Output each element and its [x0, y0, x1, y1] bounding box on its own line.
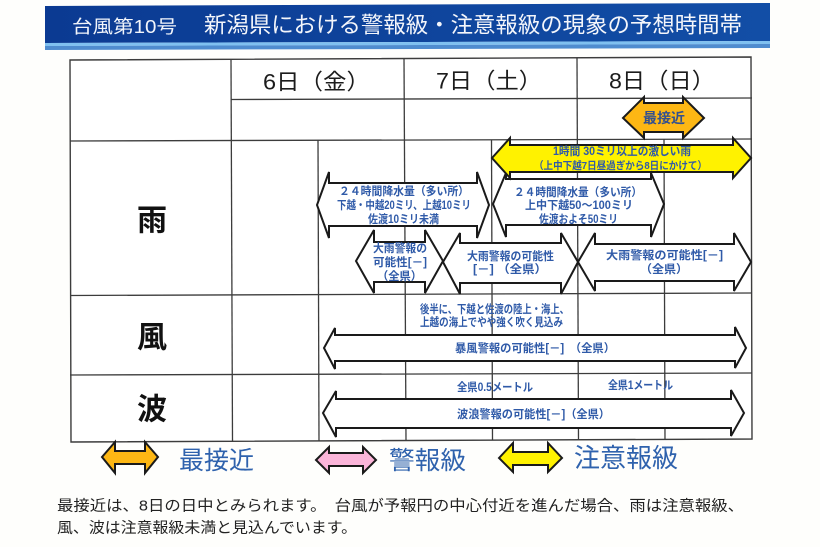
arrow: 24h rain left [317, 172, 489, 238]
legend: advisory level [499, 443, 678, 473]
legend: warning level: 警報級 [389, 447, 466, 475]
arrow: storm warning possibility [324, 327, 746, 369]
arrow: 24h rain right: 佐渡およそ50ミリ [539, 212, 618, 226]
row label: wind: 風 [137, 322, 167, 354]
legend: closest approach [102, 442, 254, 475]
arrow: heavy rain warning possibility 2: [－] （全県） [473, 262, 547, 276]
arrow: 24h rain right: 上中下越50～100ミリ [525, 198, 633, 212]
arrow: heavy rain advisory yellow [492, 138, 751, 178]
timetable grid [70, 57, 752, 442]
footer note: 最接近は、8日の日中とみられます。 台風が予報円の中心付近を進んだ場合、雨は注意報級、 [57, 498, 744, 514]
arrow: closest approach [623, 97, 704, 138]
day: 6th Friday: 6日（金） [263, 70, 370, 94]
arrow: 24h rain left: ２４時間降水量（多い所） [339, 184, 469, 198]
arrow: high wave warning possibility: 波浪警報の可能性[－]（全県） [457, 407, 610, 421]
title banner [45, 3, 770, 50]
arrow: heavy rain warning possibility 1: （全県） [377, 269, 422, 283]
arrow: heavy rain warning possibility 1 [356, 230, 443, 293]
arrow: 24h rain left: 下越・中越20ミリ、上越10ミリ [337, 198, 471, 212]
legend: closest approach: 最接近 [179, 447, 254, 475]
day headers [263, 68, 715, 94]
arrow: heavy rain warning possibility 3: （全県） [640, 262, 688, 276]
arrow: 24h rain left: 佐渡10ミリ未満 [368, 212, 439, 226]
arrow: heavy rain warning possibility 3: 大雨警報の可能性[－] [606, 248, 723, 262]
title: typhoon number: 台風第10号 [72, 17, 177, 37]
arrow: heavy rain advisory yellow: （上中下越7日昼過ぎから8日にかけて） [534, 159, 707, 172]
row label: rain: 雨 [137, 204, 167, 238]
footer note [57, 498, 744, 536]
arrow: heavy rain advisory yellow: 1時間 30ミリ以上の激しい雨 [553, 144, 691, 158]
arrow: storm warning possibility: 暴風警報の可能性[－] （全県） [455, 341, 615, 355]
footer note: 風、波は注意報級未満と見込んでいます。 [57, 520, 357, 536]
legend: warning level [316, 447, 466, 475]
row label: waves: 波 [137, 394, 167, 426]
arrow: closest approach: 最接近 [643, 110, 685, 126]
arrow: heavy rain warning possibility 3 [578, 233, 751, 291]
day: 8th Sunday: 8日（日） [609, 68, 715, 94]
day: 7th Saturday: 7日（土） [436, 68, 542, 94]
arrow: heavy rain warning possibility 2 [443, 233, 578, 294]
legend: advisory level: 注意報級 [574, 443, 678, 473]
title: main heading: 新潟県における警報級・注意報級の現象の予想時間帯 [204, 12, 742, 38]
arrow: 24h rain right [493, 173, 664, 237]
arrow: heavy rain warning possibility 1: 大雨警報の [373, 241, 427, 255]
wave height: 0.5 m: 全県0.5メートル [457, 380, 533, 394]
arrow: 24h rain right: ２４時間降水量（多い所） [514, 185, 642, 199]
wind note: 後半に、下越と佐渡の陸上・海上、 [420, 302, 569, 316]
wind note: 上越の海上でやや強く吹く見込み [420, 315, 563, 329]
wind note [420, 302, 569, 329]
arrow: heavy rain warning possibility 1: 可能性[－] [373, 255, 427, 269]
arrow: high wave warning possibility [323, 390, 744, 437]
wave height: 1 m: 全県1メートル [608, 378, 673, 392]
arrow: heavy rain warning possibility 2: 大雨警報の可能性 [467, 249, 554, 263]
row labels [137, 204, 167, 426]
